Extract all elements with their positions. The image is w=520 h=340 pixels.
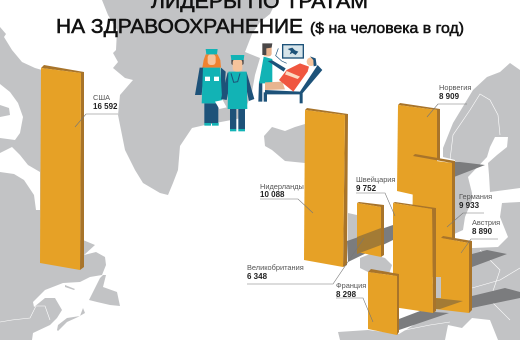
label: Norway: Норвегия	[439, 83, 471, 92]
label: Netherlands: Нидерланды	[260, 182, 304, 191]
label: France: 8 298	[336, 290, 357, 299]
label: Germany: 9 933	[459, 201, 480, 210]
map: Scandinavia and Eastern Europe	[338, 63, 520, 340]
bar: USA	[40, 65, 84, 270]
label: Switzerland	[356, 175, 395, 216]
bar: Switzerland	[393, 202, 436, 313]
label: Netherlands	[260, 182, 313, 213]
label: Austria: 8 890	[472, 227, 493, 236]
subtitle: НА ЗДРАВООХРАНЕНИЕ	[56, 16, 303, 38]
label: Netherlands: 10 088	[260, 190, 285, 199]
map: Newfoundland	[89, 275, 120, 306]
map: Greenland	[102, 0, 277, 195]
map: borders	[0, 94, 520, 330]
icon: ultrasound monitor	[276, 45, 303, 63]
map: Scotland and Ireland	[348, 213, 357, 252]
icon: patient on couch	[264, 56, 322, 103]
icon: doctor	[215, 55, 254, 131]
bar: Germany	[412, 154, 455, 277]
map: Adriatic Sea	[476, 323, 497, 340]
bar: France	[368, 269, 399, 335]
icon: sonographer	[258, 43, 286, 102]
map: Anticosti	[65, 285, 75, 290]
map: Great Britain	[360, 254, 392, 274]
map: Gulf of Bothnia and Baltic Sea	[452, 137, 520, 248]
label: Germany	[447, 192, 492, 227]
subtitle: ($ на человека в год)	[310, 20, 464, 37]
map: Hudson Bay	[0, 84, 23, 140]
bar: Great Britain	[357, 202, 384, 257]
map: Hudson Bay island	[0, 105, 10, 117]
label: Norway	[427, 83, 471, 117]
label: USA: США	[93, 93, 110, 102]
map: Iceland	[264, 124, 305, 163]
bar: Norway	[397, 103, 440, 200]
bar: Netherlands	[304, 108, 348, 267]
label: Norway: 8 909	[439, 92, 460, 101]
icon: nurse	[195, 49, 226, 126]
label: Austria	[461, 218, 500, 253]
label: Great Britain	[247, 238, 364, 284]
label: Austria: Австрия	[472, 218, 500, 227]
map: Nova Scotia	[57, 308, 85, 331]
subtitle	[56, 16, 464, 38]
label: USA	[75, 93, 118, 127]
label: Great Britain: 6 348	[247, 272, 268, 281]
label: Great Britain: Великобритания	[247, 263, 304, 272]
label: USA: 16 592	[93, 102, 118, 111]
label: Switzerland: 9 752	[356, 184, 377, 193]
map: James Bay inlet	[0, 147, 40, 210]
shadows on the map	[347, 162, 520, 330]
bar: Austria	[435, 236, 472, 313]
label: Germany: Германия	[459, 192, 492, 201]
label: Switzerland: Швейцария	[356, 175, 395, 184]
label: France	[336, 281, 373, 322]
map: Canada	[0, 27, 106, 340]
label: France: Франция	[336, 281, 366, 290]
icon: medical staff and patient	[195, 43, 322, 131]
